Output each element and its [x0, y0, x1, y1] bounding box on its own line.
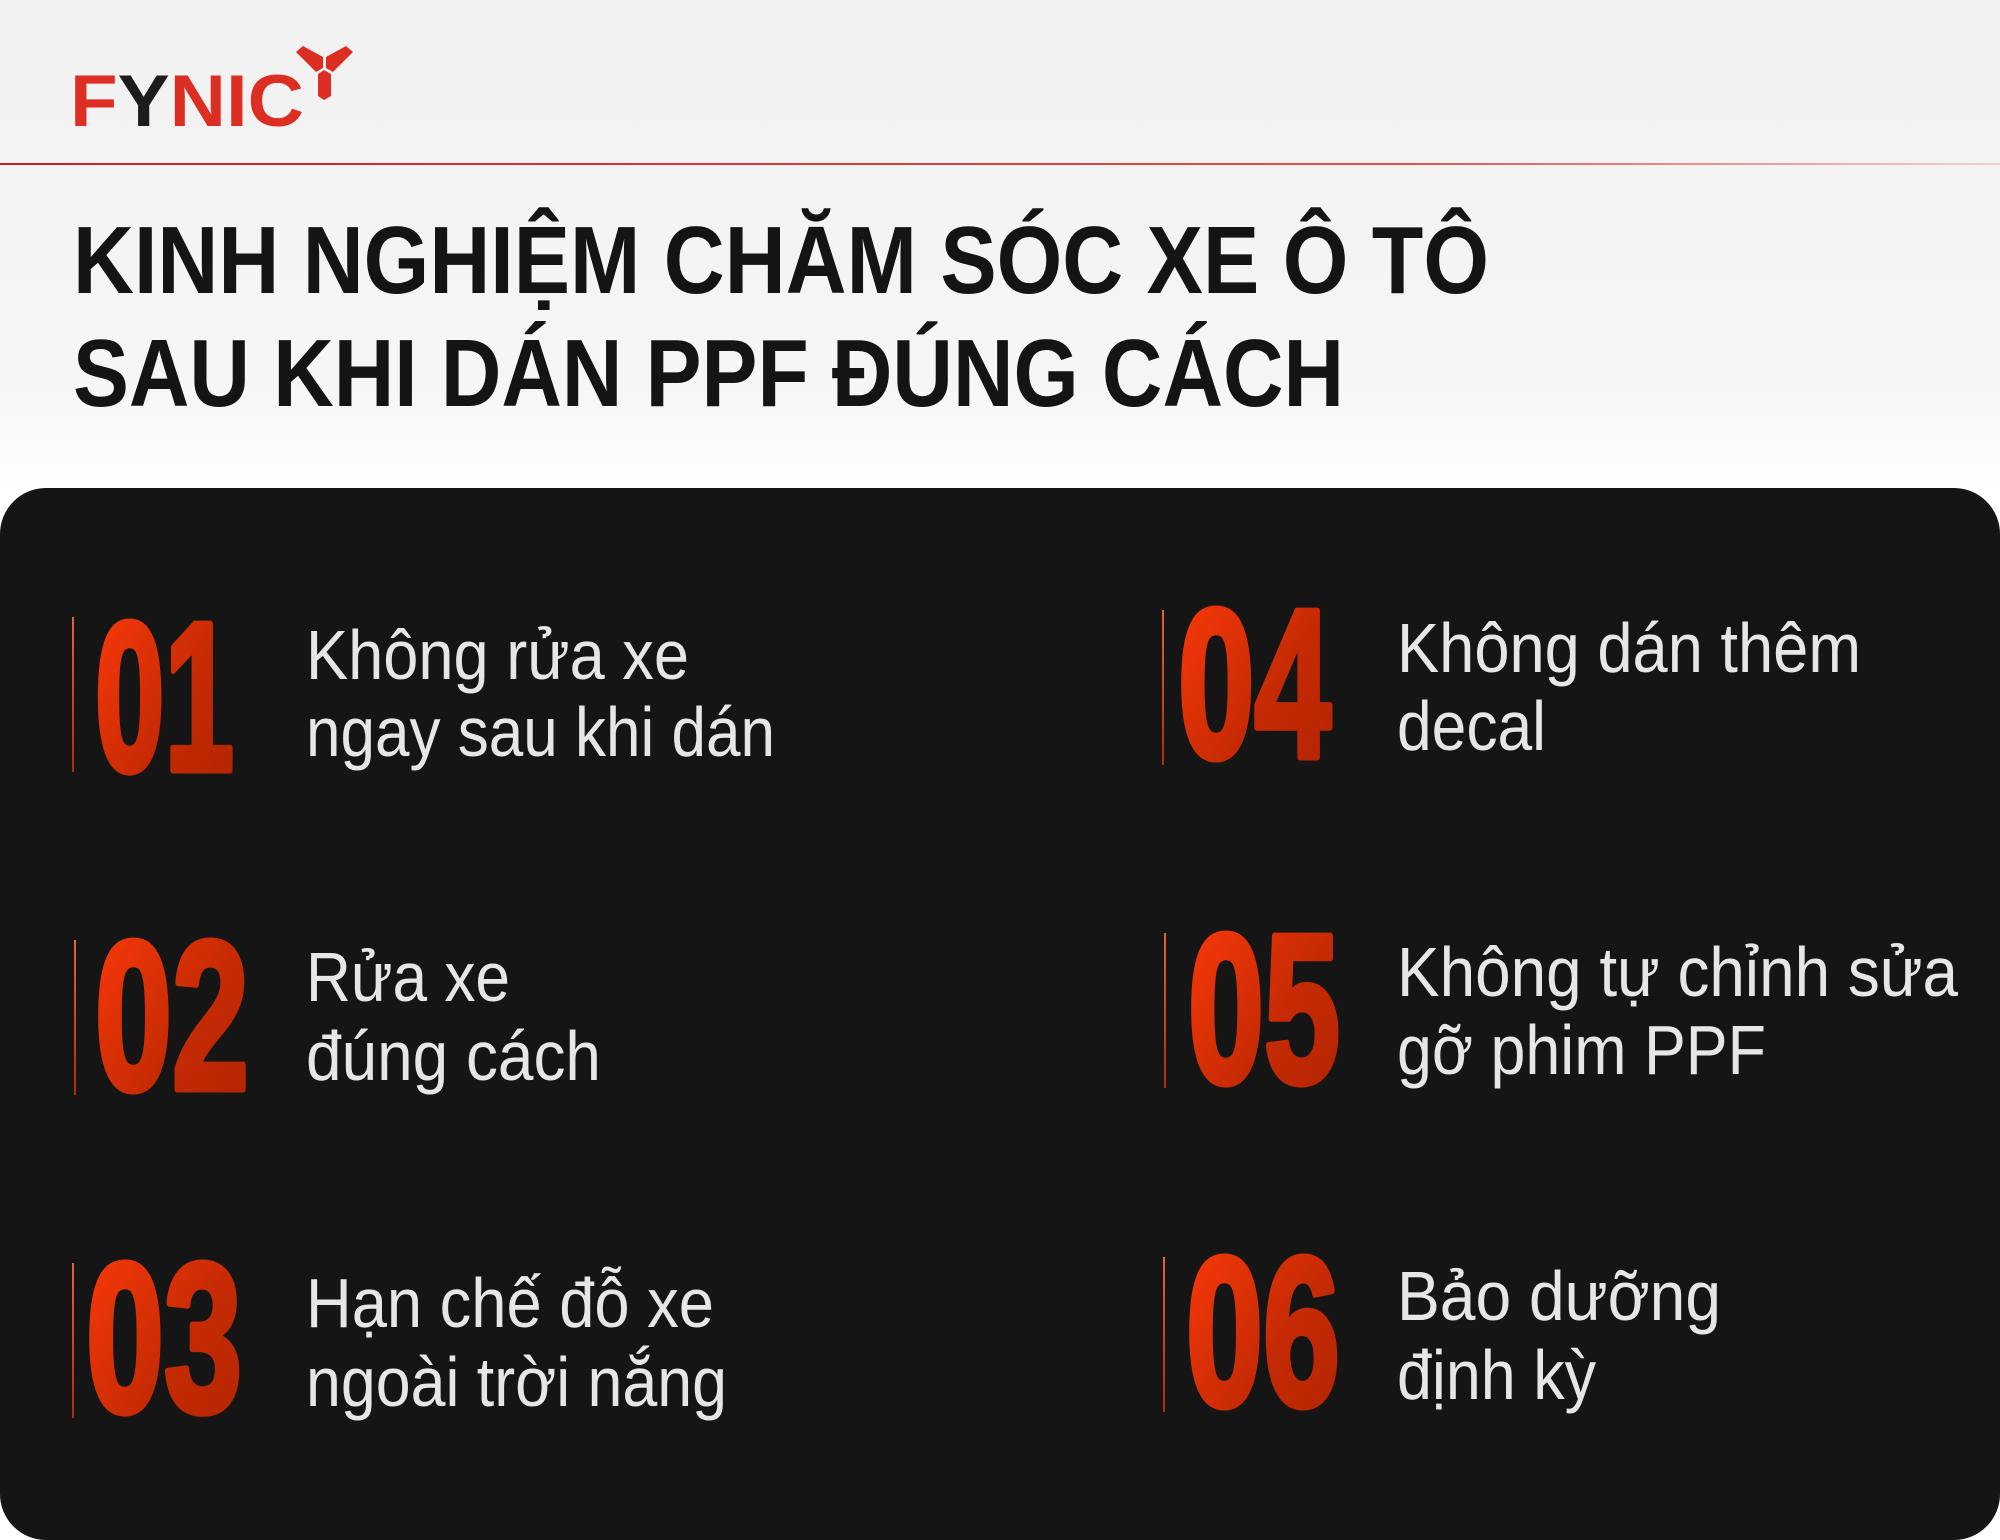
item 03: Hạn chế đỗ xe	[306, 1264, 714, 1342]
item 05: 05	[1188, 890, 1340, 1127]
item 06	[1163, 1213, 1721, 1450]
item 05: gỡ phim PPF	[1397, 1011, 1766, 1089]
item 01: ngay sau khi dán	[306, 693, 775, 771]
item 02: Rửa xe	[306, 938, 510, 1016]
item 02: 02	[95, 897, 249, 1134]
item 05: Không tự chỉnh sửa	[1397, 933, 1958, 1011]
item 06: Bảo dưỡng	[1397, 1257, 1721, 1335]
panel: tips	[0, 488, 2000, 1540]
item 04: Không dán thêm	[1397, 609, 1861, 687]
item 04: 04	[1178, 565, 1331, 802]
title	[73, 206, 1489, 427]
item 02	[74, 897, 601, 1134]
item 03: ngoài trời nắng	[306, 1343, 727, 1421]
title: SAU KHI DÁN PPF ĐÚNG CÁCH	[73, 320, 1344, 427]
item 03	[72, 1219, 727, 1456]
item 06: 06	[1186, 1213, 1340, 1450]
logo: FYNIC: FYNIC	[70, 61, 304, 142]
item 05	[1164, 890, 1958, 1127]
item 01	[72, 578, 775, 815]
item 04	[1162, 565, 1861, 802]
item 01: 01	[95, 578, 234, 815]
item 02: đúng cách	[306, 1017, 601, 1095]
item 03: 03	[86, 1219, 242, 1456]
logo: FYNIC	[70, 46, 353, 142]
title: KINH NGHIỆM CHĂM SÓC XE Ô TÔ	[73, 206, 1489, 314]
item 06: định kỳ	[1397, 1336, 1596, 1414]
item 01: Không rửa xe	[306, 616, 689, 694]
item 04: decal	[1397, 687, 1546, 765]
